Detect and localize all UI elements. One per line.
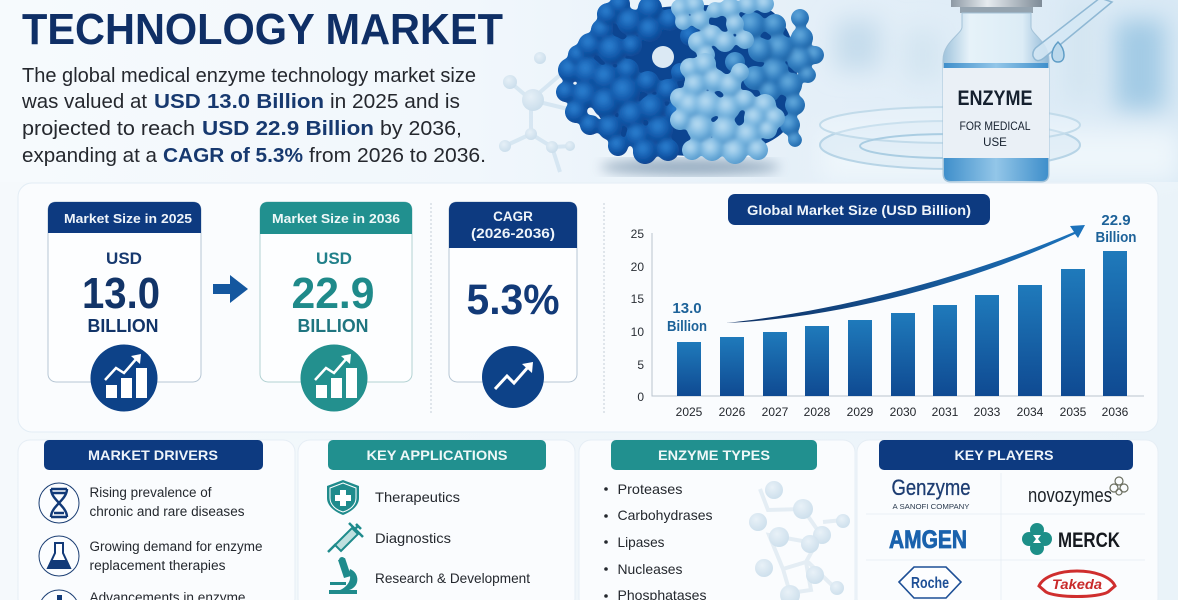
label: 2036 value	[1096, 212, 1136, 246]
text: driver 1: chronic and rare diseases	[90, 504, 245, 519]
bars	[677, 251, 1127, 396]
panel: key applications	[298, 440, 575, 600]
intro text: from 2026 to 2036.	[309, 145, 486, 167]
icon: growth bars	[90, 344, 158, 412]
heading	[328, 440, 546, 470]
intro text: was valued at	[21, 91, 147, 113]
icon: flask	[39, 536, 79, 576]
y axis labels: 20	[631, 260, 644, 274]
intro text: USD 22.9 Billion	[202, 118, 374, 140]
y axis labels: 15	[631, 292, 644, 306]
card: market size 2025: 13.0	[82, 269, 160, 318]
heading: MARKET DRIVERS	[88, 447, 218, 463]
vial label text	[958, 87, 1032, 149]
icon: shield	[327, 480, 359, 515]
icon: syringe	[328, 523, 363, 552]
panel: market statistics	[18, 183, 1158, 432]
x axis labels: 2026	[719, 405, 746, 419]
logo: Genzyme: Genzyme	[892, 475, 970, 500]
petri dish	[820, 107, 1080, 169]
vial label text: USE	[983, 137, 1007, 149]
card: market size 2036	[260, 202, 412, 412]
bar chart: global market size	[631, 194, 1144, 419]
list: enzyme types: Lipases	[618, 534, 664, 550]
text: research: Research & Development	[375, 570, 530, 586]
enzyme vial	[943, 0, 1049, 182]
card: CAGR: CAGR	[493, 209, 533, 224]
pipette	[1033, 0, 1112, 62]
card: market size 2036: 22.9	[292, 269, 374, 318]
intro text: CAGR of 5.3%	[163, 145, 303, 167]
x axis labels: 2028	[804, 405, 831, 419]
vial label text: ENZYME	[958, 87, 1032, 110]
panel: key players	[857, 440, 1158, 600]
logo: Amgen: AMGEN	[889, 526, 967, 554]
logo: Merck: MERCK	[1058, 529, 1120, 552]
x axis labels: 2031	[932, 405, 959, 419]
label: 2025 value: 13.0	[672, 300, 702, 317]
intro text	[21, 65, 486, 167]
x axis labels: 2030	[890, 405, 917, 419]
card: market size 2036: Market Size in 2036	[272, 211, 400, 226]
intro text: projected to reach	[22, 118, 195, 140]
logo: Takeda	[1039, 571, 1115, 596]
chart title	[728, 194, 990, 225]
arrow: growth trend	[726, 225, 1085, 323]
page margin	[1178, 0, 1200, 600]
label: 2025 value	[667, 300, 707, 335]
logo: Genzyme: A SANOFI COMPANY	[892, 502, 970, 511]
heading	[611, 440, 817, 470]
text: driver 2	[90, 539, 262, 573]
card: market size 2025	[48, 202, 201, 412]
vial label text: FOR MEDICAL	[960, 119, 1031, 133]
intro text: USD 13.0 Billion	[154, 91, 324, 113]
intro text: by 2036,	[380, 118, 462, 140]
molecule watermark	[749, 481, 850, 600]
x axis labels: 2029	[847, 405, 874, 419]
heading: KEY APPLICATIONS	[366, 447, 508, 463]
label: 2025 value: Billion	[667, 318, 707, 335]
chart title: Global Market Size (USD Billion)	[747, 202, 971, 218]
x axis labels: 2036	[1102, 405, 1129, 419]
text: diagnostics: Diagnostics	[375, 530, 451, 546]
list: enzyme types: Proteases	[618, 481, 682, 497]
heading	[879, 440, 1133, 470]
intro text: The global medical enzyme technology market size	[22, 65, 476, 87]
text: therapeutics: Therapeutics	[375, 489, 460, 505]
text: driver 1	[90, 485, 245, 519]
text: driver 2: replacement therapies	[90, 558, 226, 573]
card: market size 2036: BILLION	[298, 316, 368, 336]
card: market size 2036: USD	[316, 249, 352, 268]
intro text: expanding at a	[22, 145, 158, 167]
label: 2036 value: 22.9	[1101, 212, 1131, 229]
x axis labels	[676, 405, 1129, 419]
title: TECHNOLOGY MARKET	[22, 5, 503, 54]
lab backdrop	[820, 0, 1180, 182]
icon: trend arrow	[482, 346, 544, 408]
intro text: in 2025 and is	[330, 91, 460, 113]
icon: microscope	[329, 557, 357, 594]
card: CAGR: 5.3%	[466, 276, 560, 324]
icon: growth bars	[300, 344, 368, 412]
text: driver 2: Growing demand for enzyme	[90, 539, 262, 554]
card: market size 2025: BILLION	[88, 316, 158, 336]
x axis labels: 2025	[676, 405, 703, 419]
list: enzyme types: Nucleases	[618, 561, 682, 577]
card: CAGR: (2026-2036)	[471, 226, 555, 241]
x axis labels: 2033	[974, 405, 1001, 419]
panel: market drivers	[18, 440, 295, 600]
panel: enzyme types	[579, 440, 855, 600]
icon: microscope partial	[39, 590, 79, 600]
x axis labels: 2027	[762, 405, 789, 419]
card: market size 2025: Market Size in 2025	[64, 211, 192, 226]
label: 2036 value: Billion	[1096, 229, 1136, 246]
y axis labels: 0	[637, 390, 644, 404]
heading: ENZYME TYPES	[658, 447, 770, 463]
logo: Takeda: Takeda	[1052, 576, 1102, 592]
x axis labels: 2034	[1017, 405, 1044, 419]
card: market size 2025: USD	[106, 249, 142, 268]
y axis labels: 25	[631, 227, 644, 241]
y axis labels: 10	[631, 325, 644, 339]
enzyme protein illustration	[556, 0, 824, 175]
card: CAGR	[449, 202, 577, 408]
logo: Roche	[899, 567, 961, 598]
heading: KEY PLAYERS	[954, 447, 1054, 463]
molecule watermark: header	[499, 52, 575, 172]
logo: Roche: Roche	[911, 575, 949, 592]
logo: Novozymes: novozymes	[1028, 485, 1112, 507]
icon: DNA	[39, 483, 79, 523]
text: driver 1: Rising prevalence of	[90, 485, 212, 500]
y axis labels: 5	[637, 358, 644, 372]
x axis labels: 2035	[1060, 405, 1087, 419]
list: enzyme types: Carbohydrases	[618, 507, 712, 523]
arrow: 2025 to 2036	[213, 275, 248, 303]
logo: Merck	[1022, 523, 1120, 555]
heading	[44, 440, 263, 470]
logo: Genzyme	[892, 475, 970, 511]
y axis labels	[631, 227, 644, 404]
list: enzyme types	[604, 481, 712, 600]
